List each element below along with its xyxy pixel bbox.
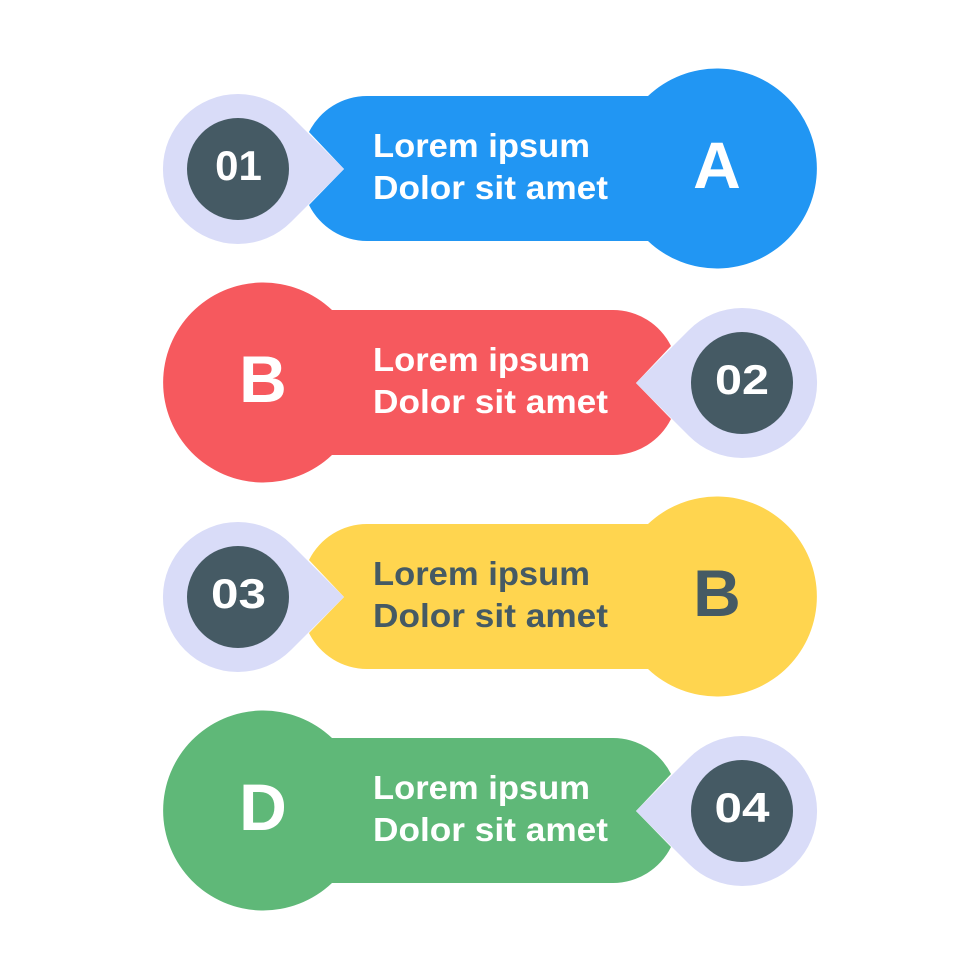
text block row 02: Dolor sit amet <box>373 383 608 420</box>
letter A: A <box>693 128 741 202</box>
text block row 01 <box>373 127 608 206</box>
red banner shape <box>163 282 671 482</box>
text block row 04 <box>373 769 608 848</box>
text block row 03 <box>373 555 608 634</box>
panel: row 02 red banner <box>163 282 817 482</box>
teardrop badge 02 <box>636 308 817 458</box>
letter B: B <box>239 342 287 416</box>
green banner shape <box>163 710 671 910</box>
text block row 04: Lorem ipsum <box>373 769 590 806</box>
text block row 03: Dolor sit amet <box>373 597 608 634</box>
text block row 03: Lorem ipsum <box>373 555 590 592</box>
text block row 02: Lorem ipsum <box>373 341 590 378</box>
panel: row 01 blue banner <box>163 68 817 268</box>
panel: row 04 green banner <box>163 710 817 910</box>
number 02: 02 <box>715 356 769 403</box>
number circle 01 <box>187 118 289 220</box>
number circle 04 <box>691 760 793 862</box>
text block row 04: Dolor sit amet <box>373 811 608 848</box>
teardrop badge 01 <box>163 94 344 244</box>
teardrop badge 04 <box>636 736 817 886</box>
panel: row 03 yellow banner <box>163 496 817 696</box>
letter B: B <box>693 556 741 630</box>
letter D: D <box>239 770 287 844</box>
number circle 03 <box>187 546 289 648</box>
text block row 02 <box>373 341 608 420</box>
text block row 01: Dolor sit amet <box>373 169 608 206</box>
blue banner shape <box>309 68 817 268</box>
number 01: 01 <box>215 142 262 189</box>
text block row 01: Lorem ipsum <box>373 127 590 164</box>
number 03: 03 <box>211 570 266 617</box>
yellow banner shape <box>309 496 817 696</box>
number 04: 04 <box>714 784 770 831</box>
number circle 02 <box>691 332 793 434</box>
teardrop badge 03 <box>163 522 344 672</box>
